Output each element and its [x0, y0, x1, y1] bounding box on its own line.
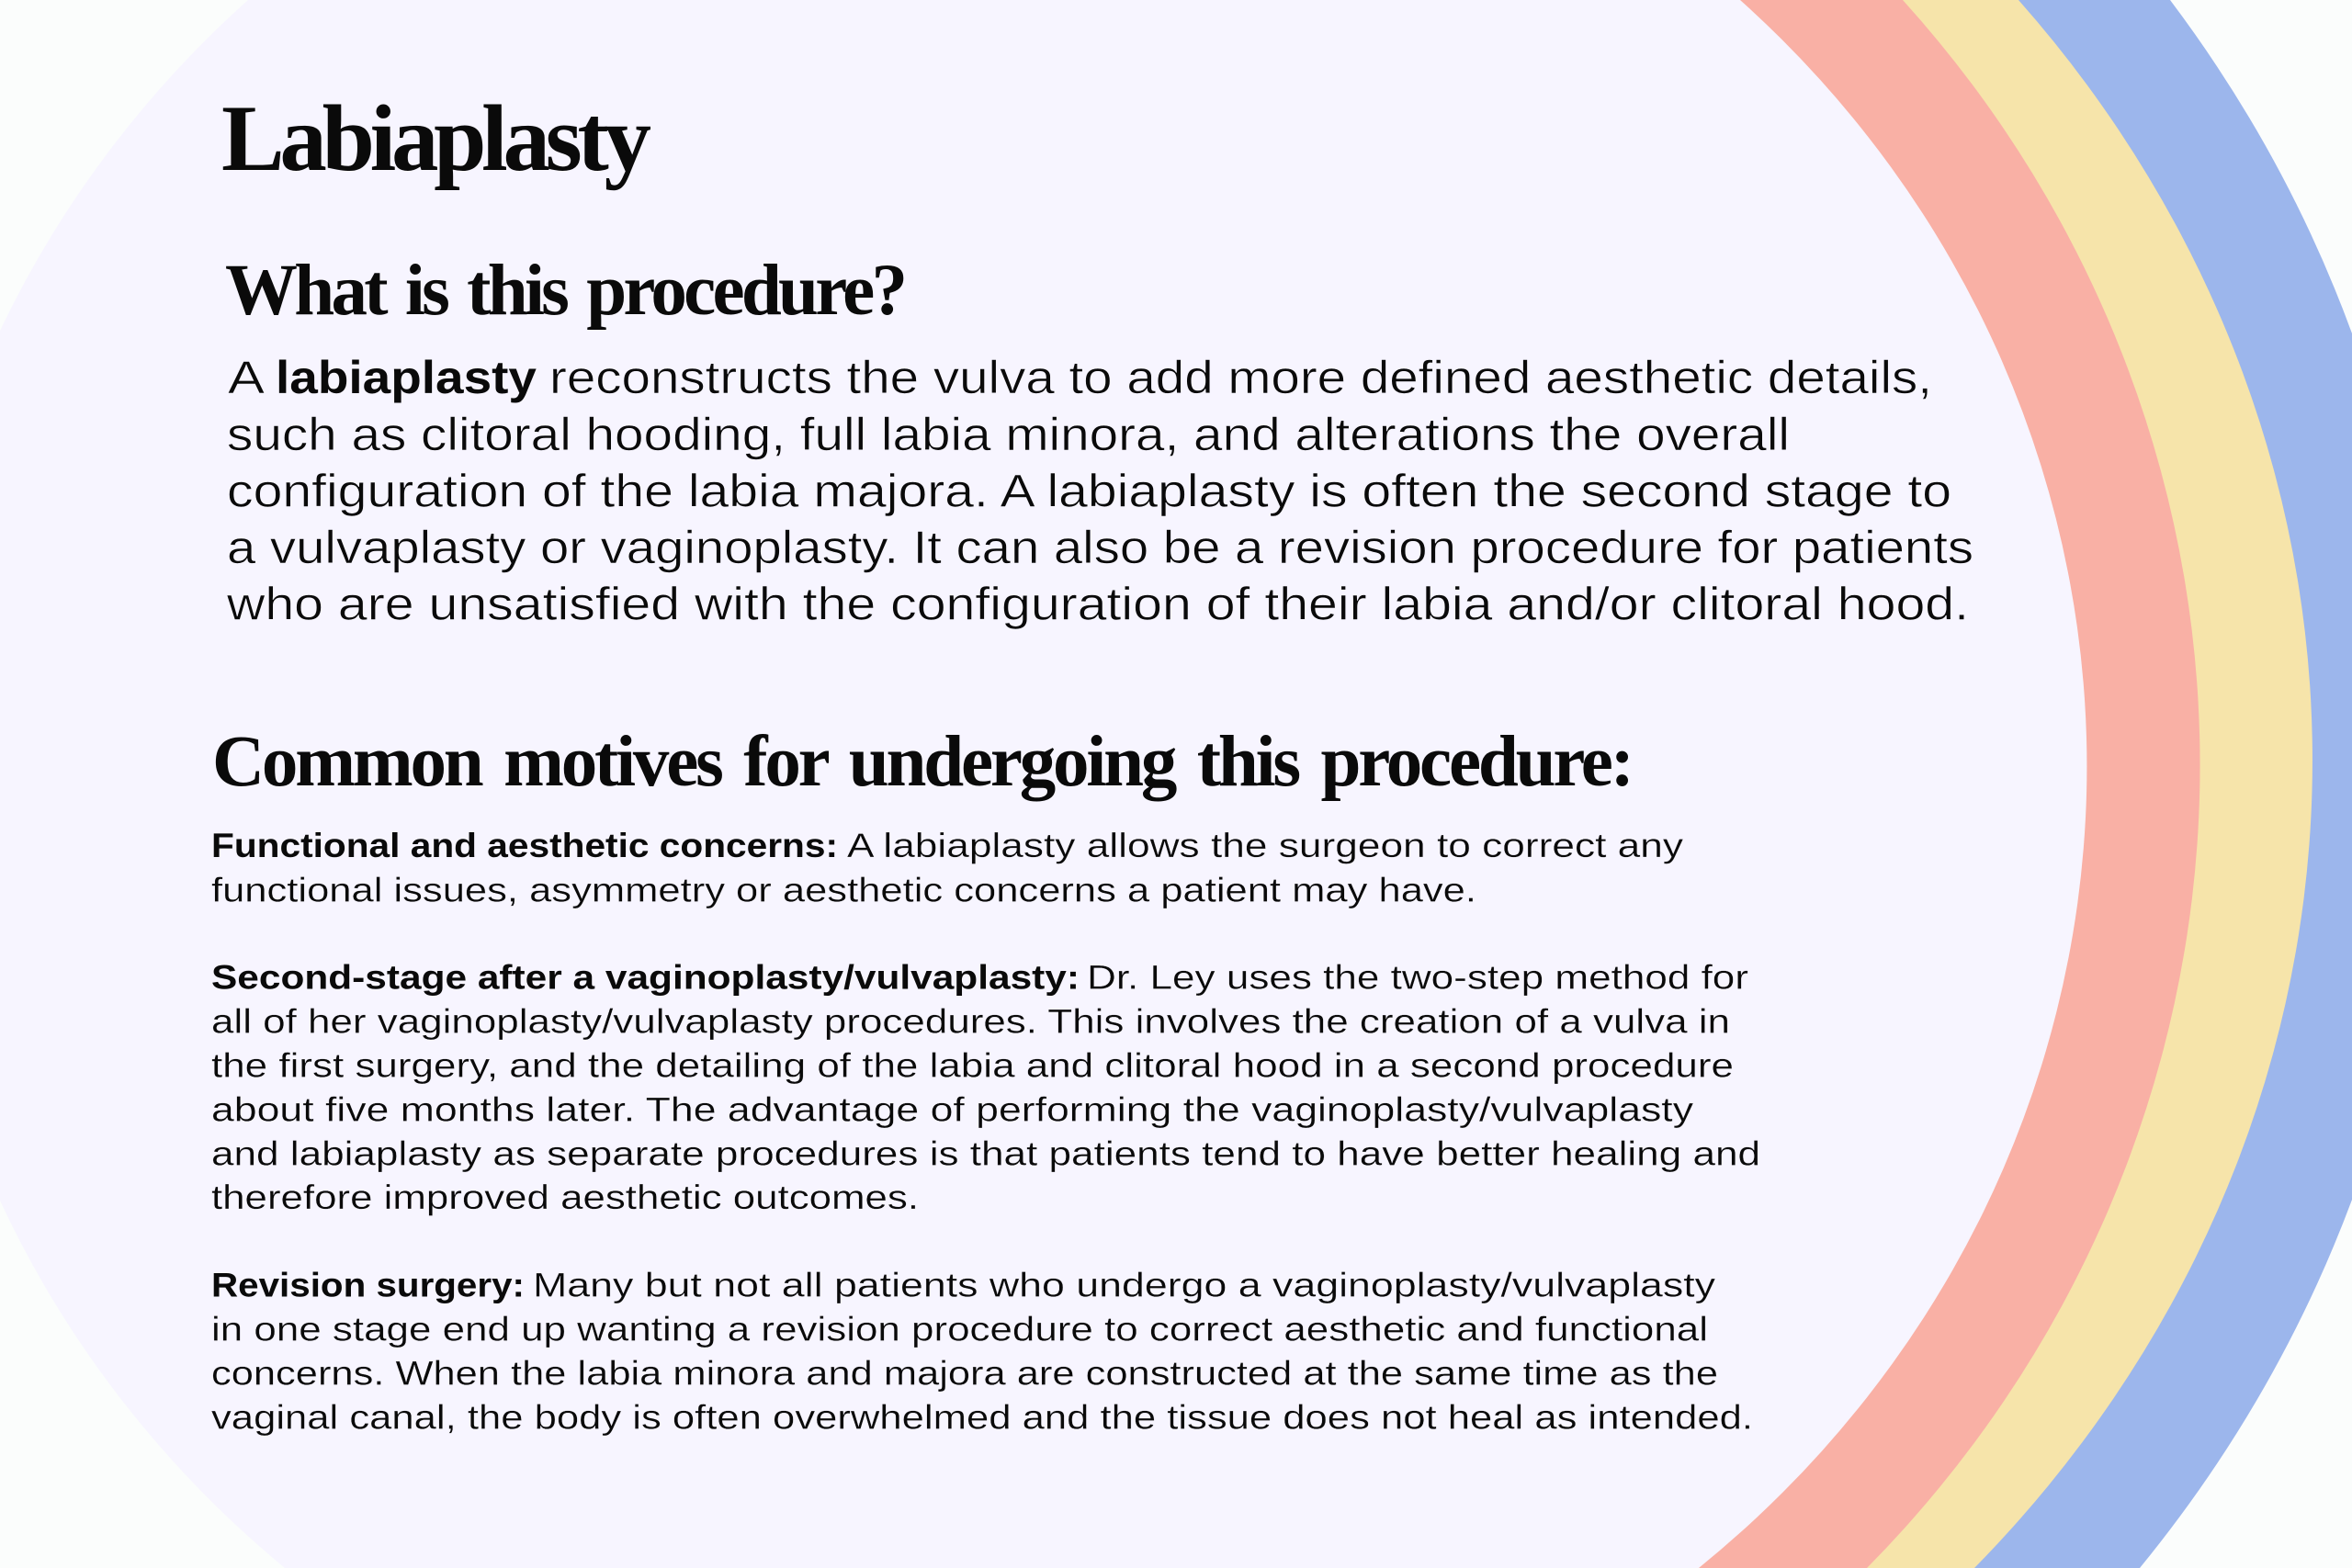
text block: functional and aesthetic concerns: [211, 827, 1684, 909]
title: Labiaplasty: [221, 86, 651, 191]
text block: revision surgery: in one stage end up wanting a revision procedure to correct aesthetic and functional: [211, 1311, 1708, 1348]
text block: revision surgery: [211, 1267, 1753, 1437]
text block: procedure description: such as clitoral hooding, full labia minora, and alterations the overall: [227, 409, 1790, 460]
text block: functional and aesthetic concerns: A labiaplasty allows the surgeon to correct any: [847, 827, 1684, 864]
text block: second stage after vaginoplasty: [211, 959, 1760, 1216]
text block: procedure description: labiaplasty: [276, 352, 537, 403]
text block: second stage after vaginoplasty: Dr. Ley uses the two-step method for: [1087, 959, 1748, 997]
text block: revision surgery: Many but not all patients who undergo a vaginoplasty/vulvaplasty: [533, 1267, 1716, 1304]
text block: functional and aesthetic concerns: functional issues, asymmetry or aesthetic concerns a patient may have.: [211, 871, 1476, 909]
arc: pink ring: [1654, 0, 2200, 1568]
text block: revision surgery: concerns. When the labia minora and majora are constructed at the same time as the: [211, 1355, 1718, 1393]
heading: what is this procedure: What is this procedure?: [225, 251, 908, 331]
text block: procedure description: configuration of the labia majora. A labiaplasty is often the second stage to: [227, 465, 1951, 516]
text block: procedure description: who are unsatisfied with the configuration of their labia and/or clitoral hood.: [226, 579, 1969, 630]
text block: revision surgery: vaginal canal, the body is often overwhelmed and the tissue does not heal as intended.: [211, 1398, 1753, 1437]
text block: second stage after vaginoplasty: therefore improved aesthetic outcomes.: [211, 1179, 919, 1216]
text block: procedure description: a vulvaplasty or vaginoplasty. It can also be a revision procedure for patients: [227, 522, 1973, 573]
text block: second stage after vaginoplasty: the first surgery, and the detailing of the labia and clitoral hood in a second procedure: [211, 1047, 1734, 1084]
text block: procedure description: [226, 352, 1973, 630]
text block: procedure description: A: [228, 352, 266, 403]
arc: yellow ring: [1654, 0, 2312, 1568]
text block: second stage after vaginoplasty: and labiaplasty as separate procedures is that patients tend to have better healing and: [211, 1134, 1760, 1172]
text block: second stage after vaginoplasty: all of her vaginoplasty/vulvaplasty procedures. This involves the creation of a vulva in: [211, 1003, 1730, 1041]
heading: common motives: Common motives for undergoing this procedure:: [212, 722, 1634, 802]
text block: revision surgery: Revision surgery:: [211, 1267, 525, 1304]
text block: procedure description: reconstructs the vulva to add more defined aesthetic details,: [549, 352, 1932, 403]
text block: second stage after vaginoplasty: about five months later. The advantage of performing the vaginoplasty/vulvaplasty: [211, 1090, 1694, 1128]
text block: functional and aesthetic concerns: Functional and aesthetic concerns:: [211, 827, 838, 864]
text block: second stage after vaginoplasty: Second-stage after a vaginoplasty/vulvaplasty:: [211, 959, 1080, 997]
arc: blue outer ring: [1654, 0, 2352, 1568]
